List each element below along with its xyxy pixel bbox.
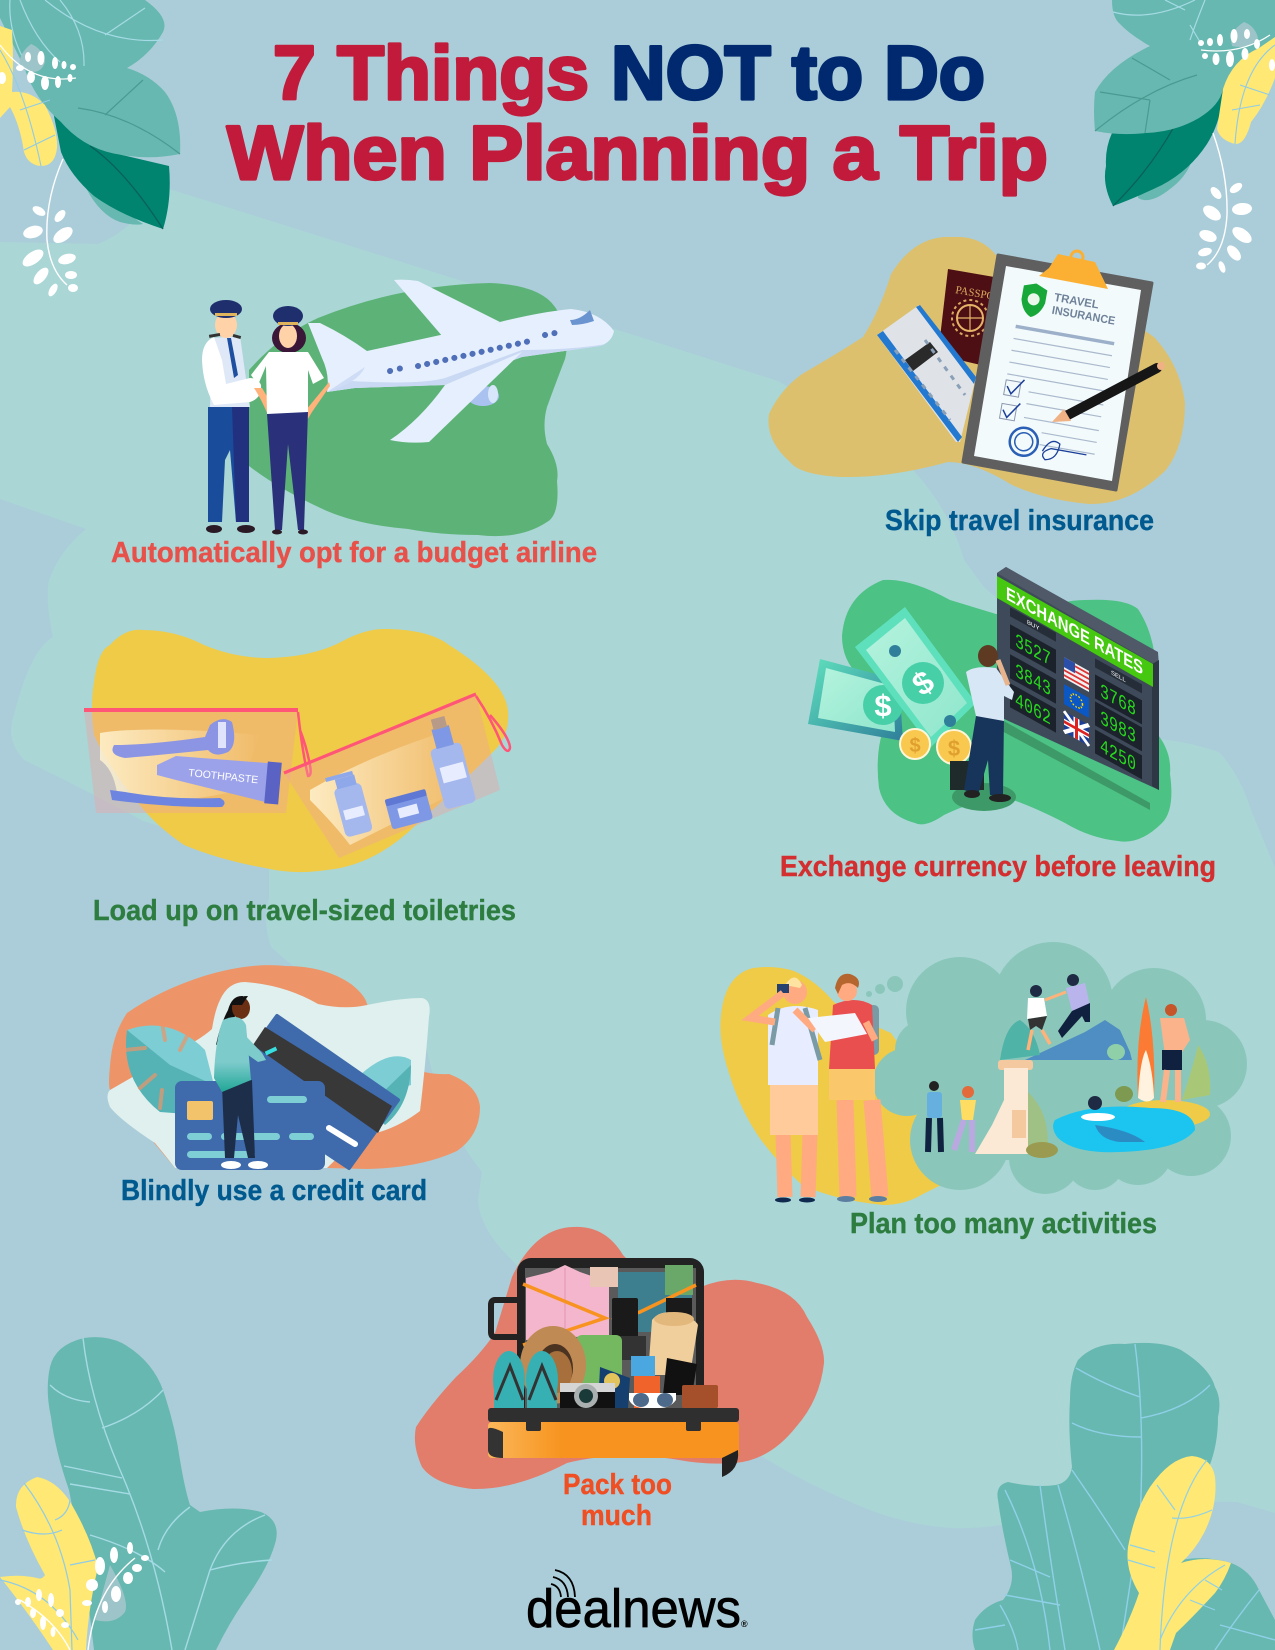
panel: pack too much	[415, 1227, 824, 1532]
pump bottle	[325, 770, 373, 839]
bottle	[422, 714, 477, 810]
foliage: bottom left	[0, 1337, 277, 1650]
panel: credit card	[108, 965, 480, 1207]
money: $	[948, 736, 960, 761]
label: Plan too many activities	[850, 1208, 1157, 1240]
toothpaste	[157, 756, 280, 804]
woman	[214, 996, 277, 1169]
exchange rates board: 4250	[1100, 735, 1136, 778]
sunglasses	[629, 1393, 676, 1408]
board floor shadow	[1000, 720, 1150, 810]
binoculars	[612, 1298, 638, 1338]
pen	[1052, 362, 1165, 422]
title: 7 Things	[273, 31, 589, 116]
exchange rates board: 3983	[1100, 707, 1136, 750]
tan blob	[768, 237, 1185, 504]
flip flops	[493, 1351, 525, 1409]
sprig: top right	[1196, 133, 1254, 274]
tourist with camera	[750, 978, 820, 1202]
title: NOT to Do	[611, 31, 985, 116]
exchange rates board: 3527	[1015, 630, 1051, 672]
left pouch	[84, 708, 311, 813]
exchange rates board: BUY	[1027, 619, 1040, 633]
camera	[560, 1388, 615, 1408]
man at board	[950, 645, 1016, 811]
label: Exchange currency before leaving	[780, 851, 1216, 883]
label	[563, 1469, 672, 1532]
money: $	[905, 663, 941, 703]
label: Pack too	[563, 1469, 672, 1501]
sprig: top left	[20, 159, 78, 298]
label: Load up on travel-sized toiletries	[93, 895, 516, 927]
pool and sand	[1053, 1086, 1210, 1152]
toothbrush	[110, 790, 225, 807]
label: Automatically opt for a budget airline	[111, 537, 597, 569]
suitcase	[488, 1258, 739, 1477]
panel: travel insurance	[768, 237, 1185, 537]
case base	[488, 1408, 739, 1422]
back card	[228, 1016, 398, 1168]
wallet	[682, 1385, 718, 1408]
thought cloud	[866, 942, 1247, 1194]
hiking scene	[1000, 974, 1132, 1060]
ruins and tourists	[927, 1060, 1058, 1158]
exchange rates board: SELL	[1111, 670, 1126, 684]
pale blob	[108, 982, 430, 1168]
passport: PASSPORT	[954, 284, 1009, 305]
exchange rates board	[997, 567, 1159, 790]
panel: exchange currency	[780, 567, 1216, 883]
airplane	[308, 280, 614, 443]
passport and items	[598, 1367, 630, 1408]
pink shirt	[526, 1265, 609, 1340]
document content: TRAVEL	[1053, 292, 1100, 312]
green blob	[249, 283, 567, 536]
dealnews logo: ®	[741, 1619, 748, 1629]
pilot: woman	[251, 306, 330, 534]
jeans	[618, 1272, 692, 1332]
panel: budget airline	[111, 280, 614, 569]
monstera leaves	[125, 1022, 411, 1125]
title: When Planning a Trip	[227, 111, 1048, 196]
surfer	[1137, 997, 1210, 1102]
exchange rates board: 4062	[1015, 689, 1051, 731]
panel: toiletries	[84, 629, 516, 927]
map scroll	[648, 1312, 698, 1375]
pilot: man	[202, 300, 261, 533]
yellow blob	[92, 629, 508, 872]
title	[227, 31, 1048, 196]
green cloth	[576, 1335, 622, 1385]
passport	[938, 269, 1009, 366]
flags	[1064, 657, 1089, 746]
label: Blindly use a credit card	[121, 1175, 427, 1207]
document content: INSURANCE	[1051, 305, 1116, 328]
foliage: bottom right	[972, 1343, 1275, 1650]
money: $	[909, 735, 921, 757]
exchange rates board: 3843	[1015, 660, 1051, 702]
boarding pass	[877, 305, 976, 442]
orange blob	[109, 965, 480, 1169]
tourist with map	[808, 974, 887, 1202]
clip	[1039, 254, 1108, 289]
exchange rates board: 3768	[1100, 680, 1136, 723]
document content	[994, 281, 1122, 468]
jar	[385, 789, 433, 830]
hat	[520, 1326, 586, 1404]
foliage: top right	[1094, 0, 1275, 206]
razor	[112, 719, 234, 758]
clipboard	[963, 251, 1152, 490]
label: much	[581, 1500, 652, 1532]
signal arcs	[551, 1570, 575, 1597]
front card	[175, 1081, 325, 1170]
money	[808, 607, 976, 764]
left pouch: TOOTHPASTE	[188, 767, 259, 786]
right pouch	[284, 694, 510, 858]
panel: too many activities	[720, 942, 1247, 1240]
dealnews logo: dealnews	[526, 1579, 741, 1639]
green blob	[842, 580, 1171, 842]
money: $	[874, 688, 892, 723]
yellow blob	[720, 967, 984, 1205]
exchange rates board: EXCHANGE RATES	[1006, 583, 1143, 680]
label: Skip travel insurance	[885, 505, 1154, 537]
straps	[523, 1284, 696, 1345]
coral blob	[415, 1227, 824, 1489]
foliage: top left	[0, 0, 180, 229]
